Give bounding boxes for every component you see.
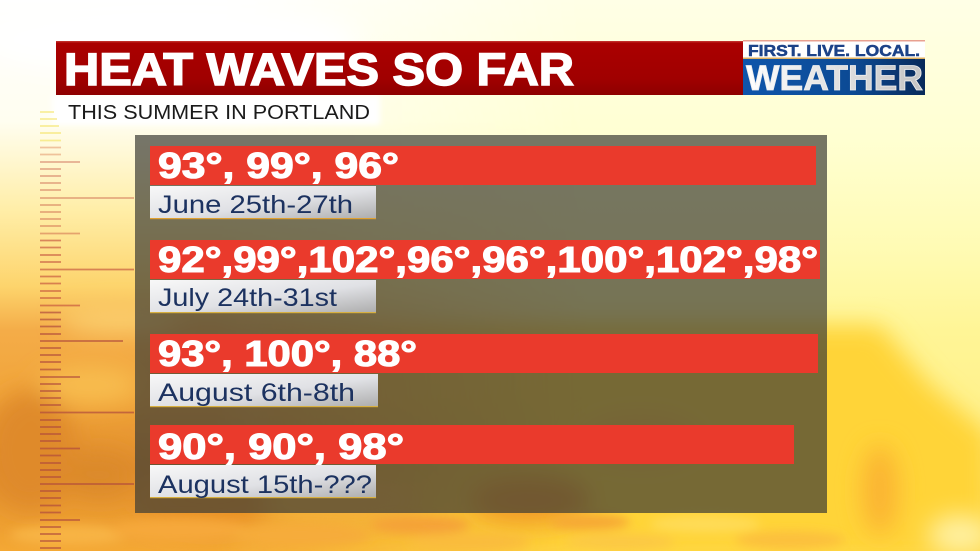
title band: HEAT WAVES SO FAR [64,44,574,95]
temperature bar 1: 93°, 99°, 96° [158,145,399,186]
date label 4 [150,465,376,499]
station logo: WEATHER [746,59,923,98]
temperature bar 3 [150,333,818,374]
heat wave 1: June [150,145,816,219]
date label 2: July 24th-31st [158,284,337,312]
data panel [135,135,827,513]
temperature bar 2: 92°,99°,102°,96°,96°,100°,102°,98° [158,239,818,280]
heat wave 2: July [150,239,820,313]
subtitle: THIS SUMMER IN PORTLAND [68,102,370,124]
heat wave 3: early August [150,333,818,407]
white glow behind subtitle [52,95,380,125]
title band [56,41,743,95]
date label 1 [150,186,376,219]
date label 3 [150,374,378,407]
station logo [743,40,925,98]
temperature bar 4: 90°, 90°, 98° [158,426,404,467]
temperature bar 4 [150,425,794,467]
temperature ruler scale [40,112,134,548]
station logo: FIRST. LIVE. LOCAL. [748,43,920,60]
heat wave 4: mid August [150,425,794,499]
date label 4: August 15th-??? [158,471,372,499]
date label 3: August 6th-8th [158,379,355,407]
date label 2 [150,280,376,313]
date label 1: June 25th-27th [158,191,353,219]
temperature bar 3: 93°, 100°, 88° [158,333,417,374]
temperature bar 1 [150,145,816,186]
